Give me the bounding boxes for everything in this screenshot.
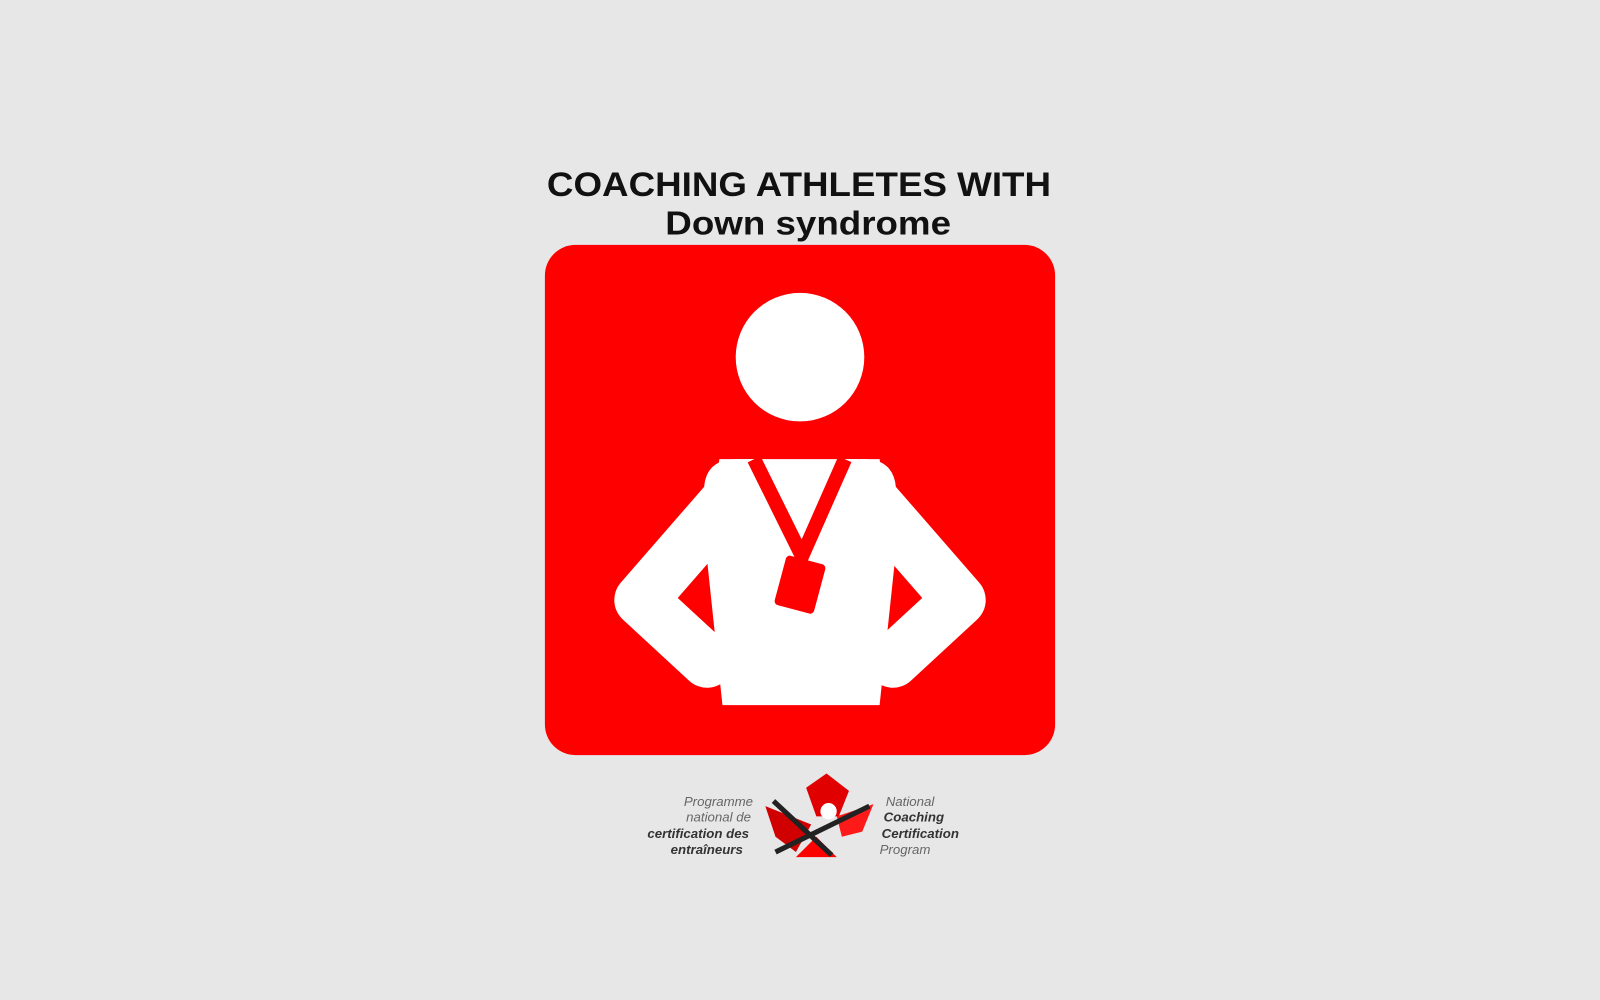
title: Down syndrome: [665, 206, 951, 243]
logo text: french: certification des: [647, 826, 749, 841]
logo text: french: entraîneurs: [671, 842, 743, 857]
logo text: english: Program: [880, 842, 930, 857]
title: COACHING ATHLETES WITH: [547, 166, 1051, 204]
logo text: french: national de: [686, 809, 751, 824]
logo text: english: [880, 794, 959, 857]
logo text: english: Certification: [882, 826, 959, 841]
logo text: english: Coaching: [884, 809, 944, 824]
icon: coach figure: [641, 293, 959, 705]
logo mark: [765, 773, 873, 857]
logo text: french: [647, 794, 753, 857]
title: [547, 166, 1051, 243]
panel: red icon box: [545, 245, 1055, 755]
logo: NCCP: [647, 773, 959, 857]
logo text: french: Programme: [684, 794, 753, 809]
logo text: english: National: [886, 794, 935, 809]
